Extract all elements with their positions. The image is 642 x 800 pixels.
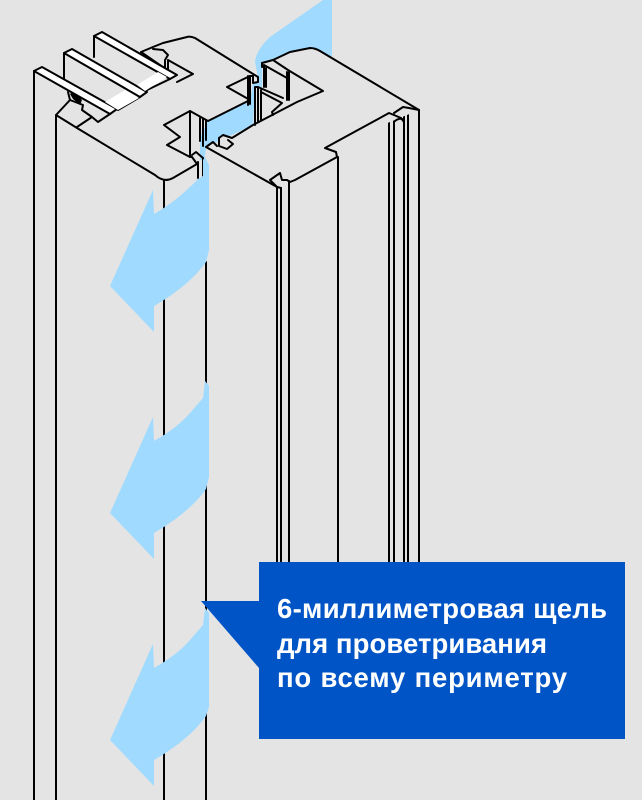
white fin 3 [94,32,177,79]
top face outline [56,37,258,180]
right profile face fill [206,48,419,187]
callout text: для проветривания [277,628,547,659]
fin web panels [64,36,170,110]
hardware detail near first fin [70,91,82,105]
callout box [201,562,625,739]
white fin 2 [64,49,147,97]
air arrow 2 [110,381,209,559]
white fin 1 [34,67,117,114]
pocket ribs [255,63,289,125]
callout text: по всему периметру [277,662,568,693]
right profile face outline [206,48,419,188]
air arrow 1 [110,157,209,332]
key slot [219,138,233,149]
white glazing strip 1 [105,90,139,110]
right profile top [206,48,419,188]
left profile vertical edges [34,71,206,800]
corner rib detail [394,107,419,122]
callout background with pointer [201,562,625,739]
white glazing strip 2 [137,72,167,91]
right profile vertical edges [277,108,419,562]
left profile top [34,32,258,180]
slot ribs of left profile [190,76,250,178]
hardware detail near third fin [141,49,193,82]
callout text [277,593,607,693]
air stream through the gap [200,0,332,160]
air arrow 3 [110,608,209,786]
callout text: 6-миллиметровая щель [277,593,607,624]
